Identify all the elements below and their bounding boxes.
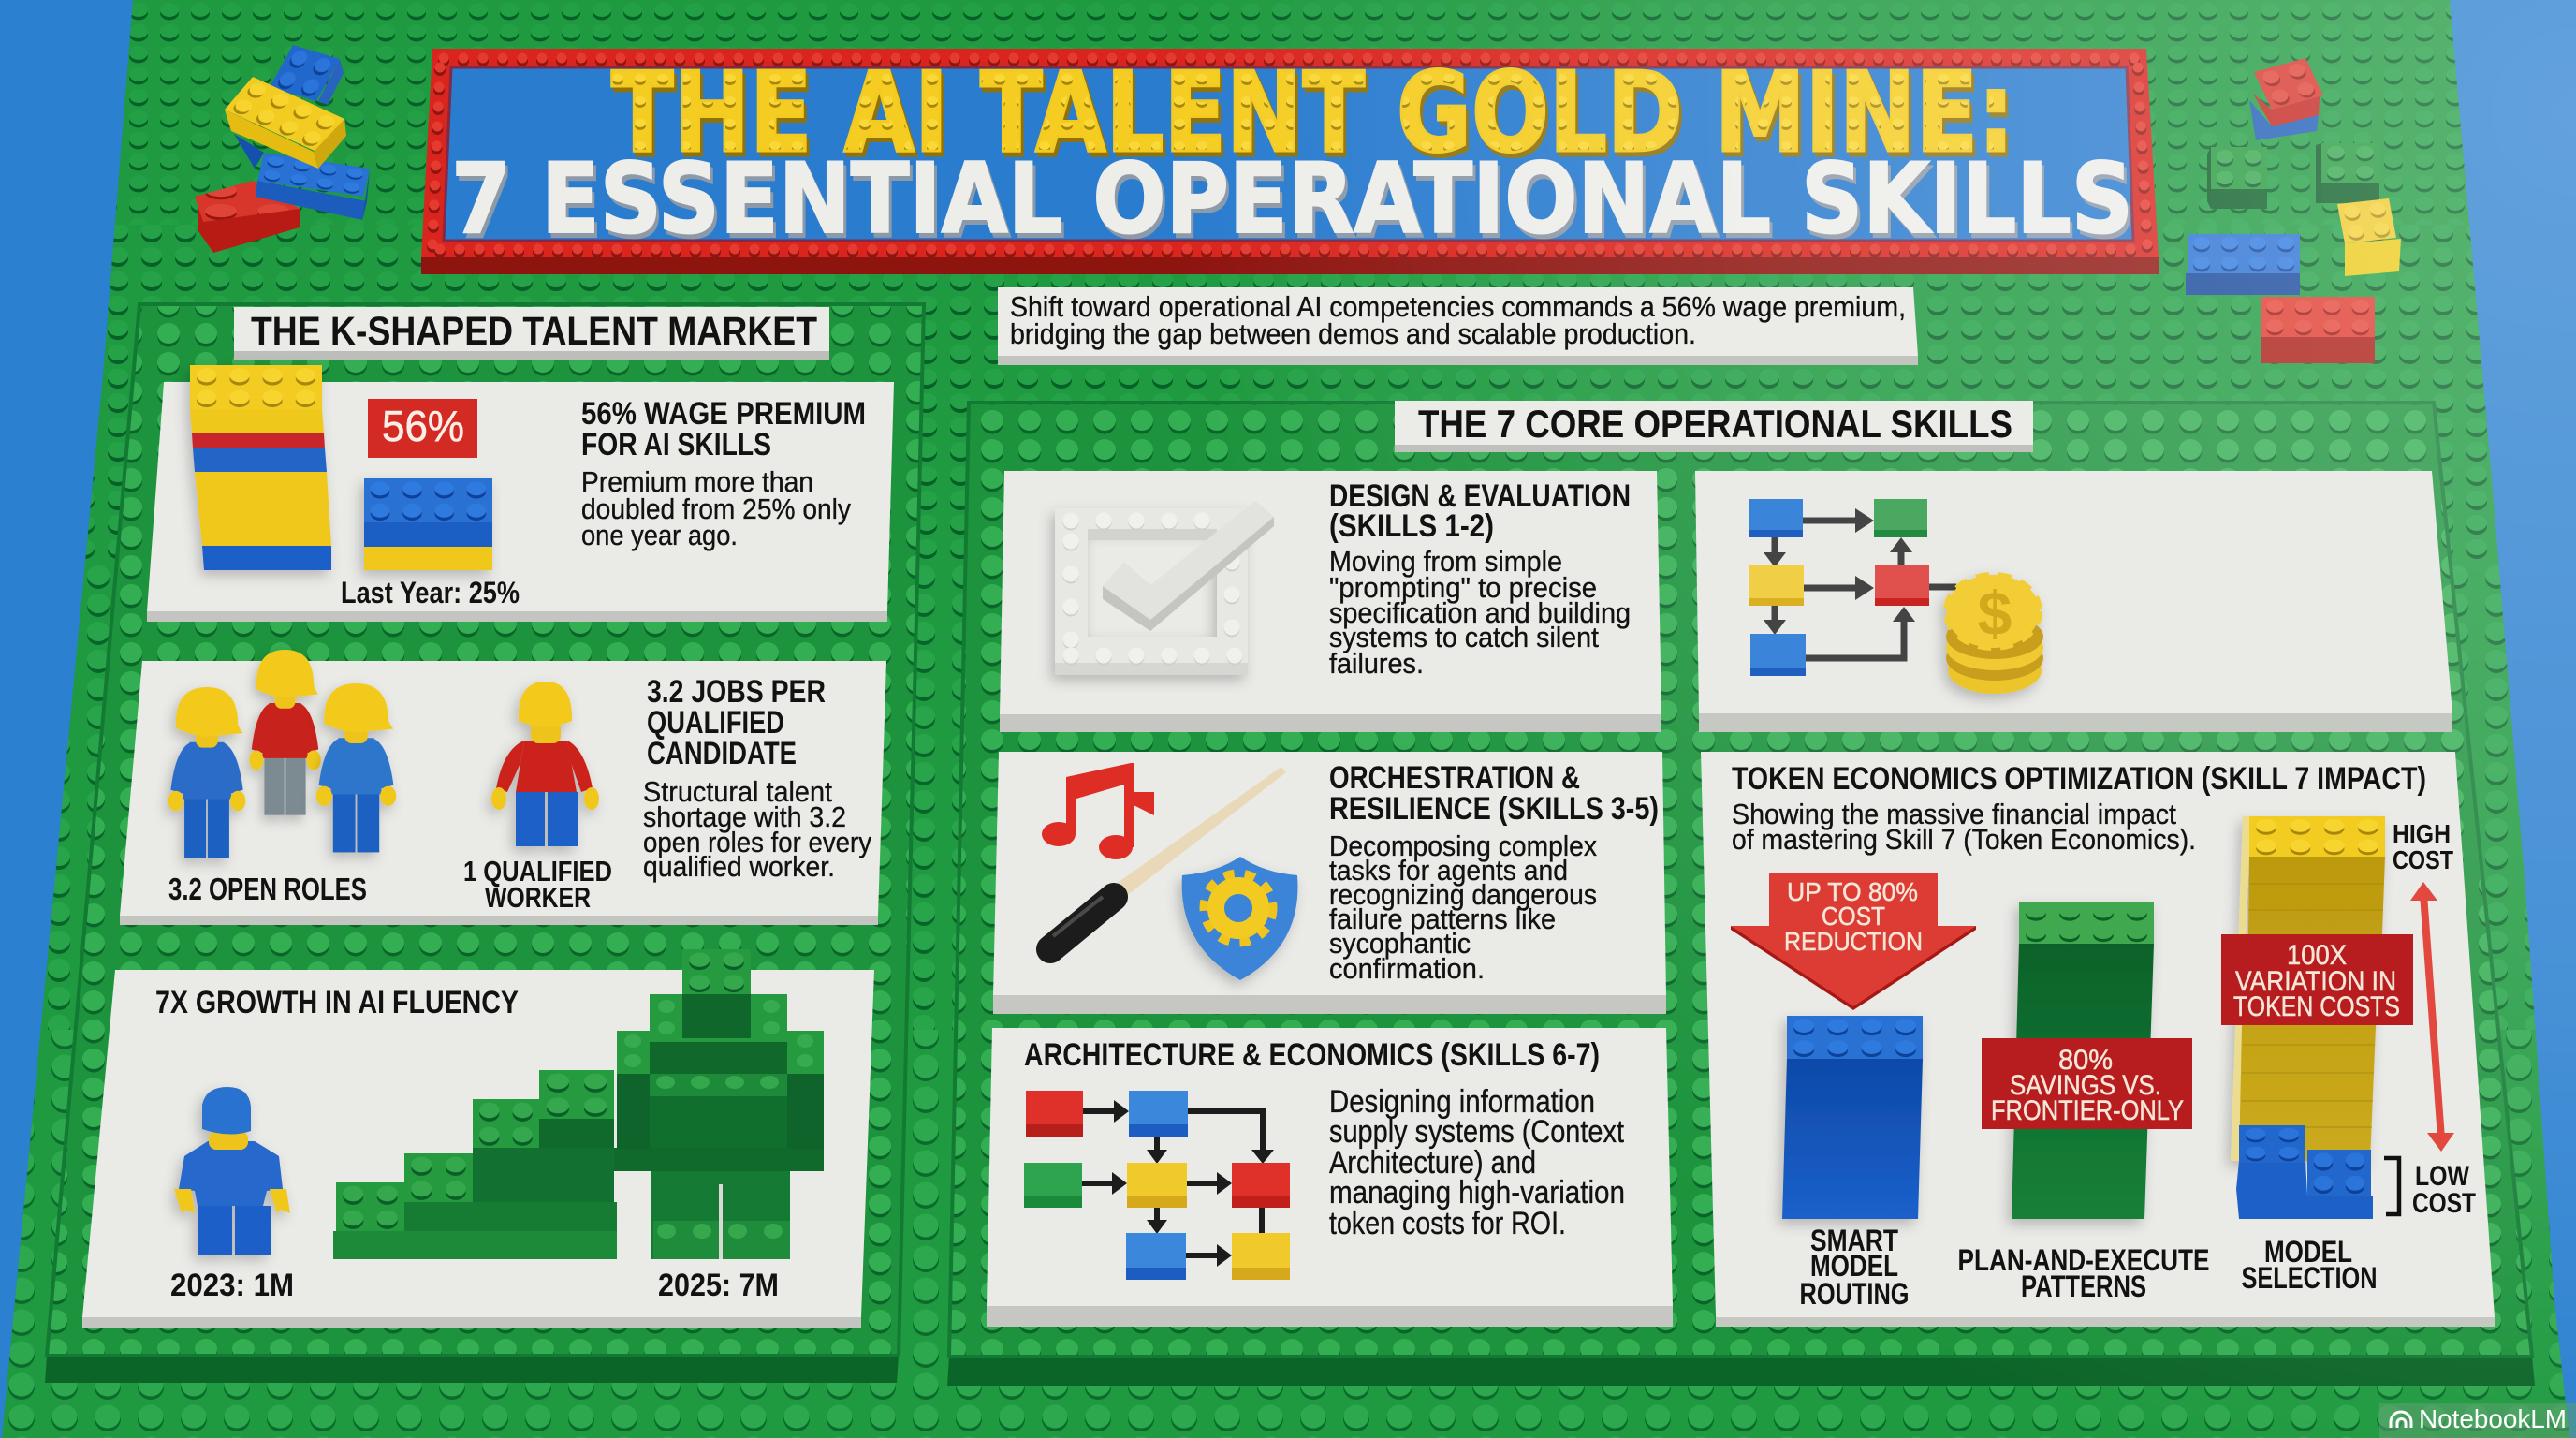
heading: wage premium: 56% WAGE PREMIUM bbox=[581, 396, 866, 432]
panel: AI fluency growth bbox=[82, 949, 874, 1328]
diagram: workflow bbox=[1749, 499, 1956, 676]
body: design: failures. bbox=[1329, 647, 1424, 680]
title line 2: 7 ESSENTIAL OPERATIONAL SKILLS bbox=[451, 143, 2133, 256]
title plaque bbox=[421, 48, 2159, 274]
body: orchestration: recognizing dangerous bbox=[1329, 878, 1597, 911]
body: jobs: shortage with 3.2 bbox=[643, 800, 846, 833]
heading: design: DESIGN & EVALUATION bbox=[1329, 478, 1631, 514]
label: smart model routing: SMART bbox=[1810, 1224, 1898, 1257]
label: plan and execute bbox=[1958, 1243, 2209, 1303]
body: wage premium bbox=[581, 465, 851, 551]
body: orchestration bbox=[1329, 829, 1597, 985]
intro note bbox=[998, 287, 1918, 365]
icon: giant green figure bbox=[614, 949, 824, 1259]
bar: smart model routing bbox=[1782, 1016, 1923, 1219]
heading: jobs bbox=[647, 674, 826, 771]
label: high cost: COST bbox=[2393, 845, 2453, 874]
diagram: flow of bricks bbox=[1024, 1091, 1290, 1280]
label: smart model routing bbox=[1799, 1224, 1910, 1311]
callout: 80 percent savings: FRONTIER-ONLY bbox=[1991, 1095, 2184, 1126]
callout: 100x variation bbox=[2221, 934, 2413, 1025]
right raised plate bbox=[947, 403, 2535, 1386]
panel: orchestration and resilience bbox=[993, 752, 1666, 1014]
label: model selection: SELECTION bbox=[2241, 1261, 2378, 1295]
callout: 100x variation: VARIATION IN bbox=[2235, 966, 2396, 997]
icon: small blue figure bbox=[174, 1087, 290, 1255]
callout: 80 percent savings: 80% bbox=[2058, 1045, 2113, 1076]
body: jobs: open roles for every bbox=[643, 826, 871, 858]
body: design: Moving from simple bbox=[1329, 545, 1562, 578]
body: jobs: Structural talent bbox=[643, 775, 832, 808]
callout: 80 percent savings: SAVINGS VS. bbox=[2010, 1070, 2161, 1101]
label: qualified worker: WORKER bbox=[485, 881, 591, 914]
body: orchestration: sycophantic bbox=[1329, 927, 1471, 960]
bar: model selection high cost bbox=[2231, 816, 2385, 1161]
watermark: NotebookLM bbox=[2379, 1403, 2576, 1438]
heading: architecture: ARCHITECTURE & ECONOMICS (SKILLS 6-7) bbox=[1024, 1037, 1600, 1073]
body: architecture: token costs for ROI. bbox=[1329, 1206, 1566, 1241]
icon: checkbox bbox=[1055, 501, 1274, 675]
label: high cost: HIGH bbox=[2393, 819, 2451, 848]
callout: 80 percent cost reduction: UP TO 80% bbox=[1787, 877, 1918, 906]
body: orchestration: confirmation. bbox=[1329, 952, 1485, 985]
body: architecture: managing high-variation bbox=[1329, 1175, 1625, 1211]
bricks: top-left pile bbox=[195, 45, 370, 253]
label: 2023: 2023: 1M bbox=[170, 1268, 294, 1303]
heading: jobs: 3.2 JOBS PER bbox=[647, 674, 826, 710]
heading: token economics: TOKEN ECONOMICS OPTIMIZATION (SKILL 7 IMPACT) bbox=[1732, 761, 2426, 797]
label: model selection: MODEL bbox=[2264, 1235, 2352, 1269]
icon: three open-role figures bbox=[168, 650, 396, 858]
callout: 80 percent savings bbox=[1982, 1038, 2192, 1129]
panel: design and evaluation bbox=[1000, 471, 1661, 732]
panel: token economics bbox=[1701, 752, 2495, 1327]
body: architecture: Designing information bbox=[1329, 1084, 1595, 1120]
left raised plate bbox=[45, 304, 924, 1383]
heading: orchestration: RESILIENCE (SKILLS 3-5) bbox=[1329, 791, 1659, 827]
intro note: Shift toward operational AI competencies commands a 56% wage premium, bbox=[1010, 290, 1906, 323]
callout: 100x variation: 100X bbox=[2287, 940, 2347, 971]
heading: fluency: 7X GROWTH IN AI FLUENCY bbox=[155, 985, 519, 1020]
body: design: systems to catch silent bbox=[1329, 621, 1599, 653]
watermark: NotebookLM: NotebookLM bbox=[2419, 1404, 2567, 1433]
heading: orchestration bbox=[1329, 760, 1659, 827]
callout: 80 percent cost reduction: COST bbox=[1822, 902, 1885, 931]
icon: one qualified worker bbox=[491, 682, 599, 846]
header: k-shaped market: THE K-SHAPED TALENT MARKET bbox=[251, 309, 817, 354]
icon: gold coin stack bbox=[1946, 575, 2043, 694]
badge: 56% bbox=[368, 399, 477, 458]
panel: jobs per candidate bbox=[120, 650, 886, 925]
label: low cost bbox=[2412, 1161, 2476, 1219]
panel: wage premium bbox=[147, 365, 894, 622]
heading: orchestration: ORCHESTRATION & bbox=[1329, 760, 1580, 796]
body: token economics: Showing the massive financial impact bbox=[1732, 798, 2176, 830]
body: orchestration: failure patterns like bbox=[1329, 902, 1556, 935]
body: token economics bbox=[1732, 798, 2196, 856]
heading: design: (SKILLS 1-2) bbox=[1329, 508, 1494, 544]
label: last year: Last Year: 25% bbox=[341, 576, 520, 609]
body: token economics: of mastering Skill 7 (Token Economics). bbox=[1732, 823, 2196, 856]
callout: 80 percent cost reduction bbox=[1731, 873, 1976, 1010]
arrow: cost range bbox=[2410, 882, 2454, 1152]
label: smart model routing: MODEL bbox=[1810, 1249, 1898, 1283]
icon: gold coin stack: $ bbox=[1978, 579, 2012, 648]
heading: design bbox=[1329, 478, 1631, 544]
body: orchestration: Decomposing complex bbox=[1329, 829, 1597, 862]
title line 1: THE AI TALENT GOLD MINE: bbox=[611, 48, 2014, 177]
label: low cost: COST bbox=[2412, 1188, 2476, 1219]
label: 2025: 2025: 7M bbox=[658, 1268, 779, 1303]
body: wage premium: doubled from 25% only bbox=[581, 492, 851, 525]
label: open roles: 3.2 OPEN ROLES bbox=[168, 872, 367, 906]
body: wage premium: Premium more than bbox=[581, 465, 813, 498]
body: design: specification and building bbox=[1329, 596, 1631, 629]
icon: shield with gear bbox=[1182, 857, 1297, 980]
panel: workflow to coins bbox=[1695, 471, 2452, 732]
label: plan and execute: PLAN-AND-EXECUTE bbox=[1958, 1243, 2209, 1277]
heading: wage premium: FOR AI SKILLS bbox=[581, 427, 771, 462]
heading: wage premium bbox=[581, 396, 866, 462]
label: qualified worker bbox=[463, 855, 612, 914]
header: 7 core skills: THE 7 CORE OPERATIONAL SKILLS bbox=[1418, 402, 2012, 446]
chart: short brick stack bbox=[364, 478, 492, 570]
chart: green staircase bbox=[333, 1070, 617, 1259]
bar: plan and execute bbox=[2012, 902, 2154, 1219]
callout: 100x variation: TOKEN COSTS bbox=[2233, 991, 2400, 1022]
label: high cost bbox=[2393, 819, 2453, 874]
intro note: bridging the gap between demos and scalable production. bbox=[1010, 317, 1696, 350]
label: model selection bbox=[2241, 1235, 2378, 1295]
body: jobs: qualified worker. bbox=[643, 850, 835, 883]
body: architecture bbox=[1329, 1084, 1625, 1241]
callout: 80 percent cost reduction: REDUCTION bbox=[1784, 927, 1923, 956]
body: architecture: Architecture) and bbox=[1329, 1145, 1536, 1181]
label: low cost: LOW bbox=[2415, 1161, 2470, 1192]
icon: music notes bbox=[1042, 763, 1154, 859]
badge: 56%: 56% bbox=[382, 402, 464, 450]
bracket: low cost bbox=[2384, 1158, 2399, 1214]
bricks: top-right scatter bbox=[2186, 58, 2401, 363]
heading: jobs: QUALIFIED bbox=[647, 705, 784, 741]
body: orchestration: tasks for agents and bbox=[1329, 854, 1568, 887]
bar: model selection low cost bbox=[2236, 1125, 2373, 1219]
chart: tall brick stack bbox=[190, 365, 331, 570]
body: architecture: supply systems (Context bbox=[1329, 1114, 1624, 1150]
panel: architecture and economics bbox=[987, 1028, 1673, 1327]
label: qualified worker: 1 QUALIFIED bbox=[463, 855, 612, 888]
label: plan and execute: PATTERNS bbox=[2021, 1269, 2146, 1303]
body: jobs bbox=[643, 775, 871, 883]
icon: conductor baton bbox=[1050, 767, 1286, 949]
body: wage premium: one year ago. bbox=[581, 519, 738, 551]
heading: jobs: CANDIDATE bbox=[647, 736, 797, 771]
body: design: "prompting" to precise bbox=[1329, 571, 1597, 604]
body: design bbox=[1329, 545, 1631, 680]
label: smart model routing: ROUTING bbox=[1799, 1277, 1910, 1311]
